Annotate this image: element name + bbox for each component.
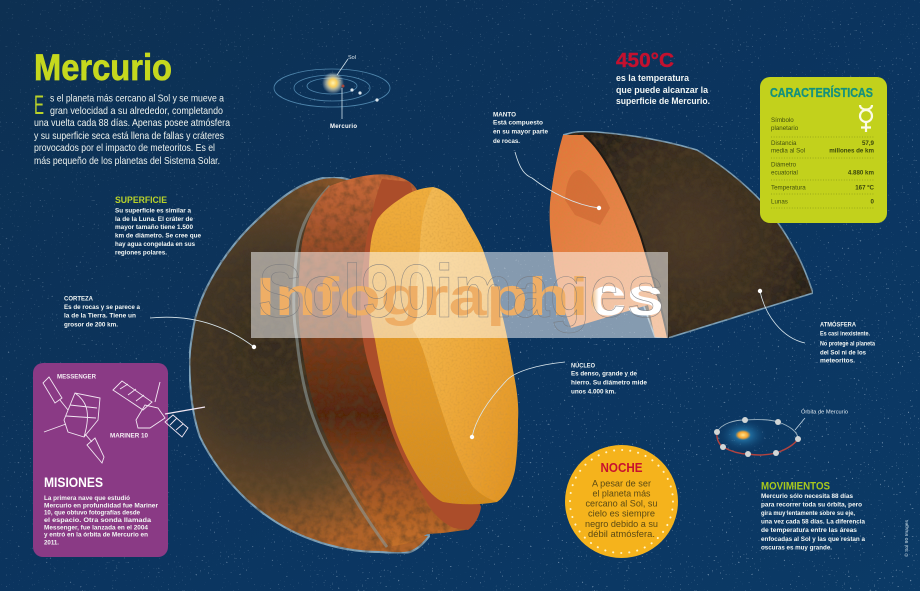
temperature callout: que puede alcanzar la: [616, 84, 709, 95]
label: atmósfera: ATMÓSFERA: [820, 320, 856, 328]
intro paragraph: más pequeño de los planetas del Sistema Solar.: [34, 156, 220, 167]
intro paragraph: [34, 90, 230, 167]
characteristics table text: planetario: [771, 125, 799, 132]
planet: upper-right wedge: [550, 131, 813, 338]
characteristics table text: [771, 117, 875, 206]
characteristics table text: 4.880 km: [848, 170, 874, 176]
características heading: CARACTERÍSTICAS: [770, 85, 873, 100]
crust outer shell: [189, 177, 430, 553]
label: superficie: hay agua congelada en sus: [115, 241, 195, 248]
characteristics table text: 167 ºC: [855, 184, 875, 192]
icon: mercury symbol: [860, 105, 872, 132]
label: atmósfera: Es casi inexistente.: [820, 330, 870, 338]
label: superficie: la de la Luna. El cráter de: [115, 216, 193, 223]
label: núcleo: Es denso, grande y de: [571, 370, 637, 378]
label: superficie: Su superficie es similar a: [115, 208, 191, 214]
intro paragraph: provocados por el impacto de meteoritos. Es el: [34, 143, 215, 154]
orbit diagram: Órbita de Mercurio: [801, 408, 848, 416]
characteristics table text: ecuatorial: [771, 170, 798, 176]
label: superficie: SUPERFICIE: [115, 195, 168, 206]
solar system diagram: Mercurio: [330, 124, 357, 130]
label: atmósfera: No protege al planeta: [820, 340, 875, 348]
planet: cut-away main body: [189, 174, 518, 553]
temperature callout: es la temperatura: [616, 72, 690, 83]
misiones text: 2011.: [44, 540, 59, 546]
icon: messenger probe: MESSENGER: [57, 374, 97, 380]
label: corteza: la de la Tierra. Tiene un: [64, 312, 136, 320]
label: movimientos: gira muy lentamente sobre su eje,: [761, 510, 855, 517]
noche heading: NOCHE: [600, 460, 643, 475]
temperature callout: superficie de Mercurio.: [616, 95, 710, 106]
label: corteza: [64, 296, 140, 328]
panel: misiones: [33, 363, 205, 557]
core flat face: [413, 187, 518, 502]
characteristics table text: Lunas: [771, 198, 788, 206]
misiones text: La primera nave que estudió: [44, 495, 130, 502]
inner dark mantle: [565, 170, 610, 225]
noche text: [585, 478, 658, 540]
label: núcleo: unos 4.000 km.: [571, 388, 616, 396]
noche text: cielo es siempre: [588, 508, 655, 520]
label: movimientos: MOVIMIENTOS: [761, 480, 830, 492]
icon: messenger probe: [43, 374, 104, 463]
panel: características: [760, 77, 887, 223]
noche text: el planeta más: [592, 488, 651, 500]
label: movimientos: enfocadas al Sol y las que restan a: [761, 536, 865, 543]
noche text: A pesar de ser: [592, 478, 652, 490]
label: movimientos: una vez cada 58 días. La diferencia: [761, 518, 865, 526]
mantle and crust boundary: [584, 135, 668, 338]
label: movimientos: [761, 480, 865, 552]
crust cut edge: [294, 186, 387, 547]
temperature callout: 450°C: [616, 50, 674, 72]
misiones text: Mercurio en profundidad fue Mariner: [44, 502, 158, 510]
label: núcleo: NÚCLEO: [571, 360, 595, 370]
intro paragraph: y su superficie seca está llena de fallas y cráteres: [34, 131, 224, 142]
icon: mariner 10 probe: MARINER 10: [110, 432, 149, 440]
label: atmósfera: [820, 320, 875, 364]
misiones text: Messenger, fue lanzada en el 2004: [44, 524, 148, 532]
misiones text: el espacio. Otra sonda llamada: [44, 517, 151, 524]
intro paragraph: una vuelta cada 88 días. Apenas posee atmósfera: [34, 118, 230, 129]
label: atmósfera: del Sol ni de los: [820, 350, 866, 356]
misiones text: 10, que obtuvo fotografías desde: [44, 510, 140, 516]
label: manto: Está compuesto: [493, 120, 543, 126]
label: núcleo: hierro. Su diámetro mide: [571, 380, 647, 386]
label: corteza: Es de rocas y se parece a: [64, 304, 140, 311]
watermark: Sol90images: [258, 249, 664, 333]
label: corteza: grosor de 200 km.: [64, 322, 118, 328]
characteristics table text: Temperatura: [771, 184, 806, 192]
characteristics table text: Distancia: [771, 140, 797, 147]
label: corteza: CORTEZA: [64, 296, 93, 302]
label: superficie: regiones polares.: [115, 250, 167, 256]
characteristics table text: media al Sol: [771, 148, 805, 154]
intro paragraph: s el planeta más cercano al Sol y se mueve a: [50, 94, 224, 104]
noche text: cercano al Sol, su: [586, 498, 658, 510]
label: manto: de rocas.: [493, 138, 520, 145]
label: movimientos: oscuras es muy grande.: [761, 544, 832, 552]
misiones heading: MISIONES: [44, 474, 103, 490]
temperature callout: [616, 50, 710, 106]
characteristics table text: Diámetro: [771, 162, 797, 168]
panel: noche: [565, 445, 678, 558]
label: manto: [493, 112, 548, 145]
title: Mercurio: [34, 47, 172, 88]
mantle: [298, 174, 480, 546]
intro paragraph: gran velocidad a su alrededor, completando: [50, 106, 223, 117]
noche text: negro debido a su: [585, 519, 658, 530]
label: movimientos: para recorrer toda su órbita, pero: [761, 502, 862, 508]
characteristics table text: 57,9: [862, 140, 875, 147]
label: superficie: [115, 195, 201, 256]
misiones text: [44, 495, 158, 546]
noche text: débil atmósfera.: [588, 529, 655, 540]
icon: mariner 10 probe: [110, 381, 205, 440]
label: manto: en su mayor parte: [493, 128, 548, 136]
label: atmósfera: meteoritos.: [820, 358, 855, 364]
label: movimientos: de temperatura entre las áreas: [761, 527, 857, 534]
watermark: Infographics: [256, 267, 664, 327]
wedge surface: [563, 131, 813, 338]
label: superficie: mayor tamaño tiene 1.500: [115, 224, 193, 231]
orbit diagram: [714, 408, 848, 457]
intro paragraph: E: [34, 90, 44, 120]
solar system diagram: Sol: [348, 55, 356, 61]
copyright note: © Sol 90 Images: [903, 519, 909, 557]
solar system diagram: [274, 55, 390, 130]
characteristics table text: Símbolo: [771, 117, 794, 124]
label: manto: MANTO: [493, 112, 516, 118]
mantle section: [550, 135, 668, 338]
label: movimientos: Mercurio sólo necesita 88 días: [761, 493, 853, 500]
mantle band bordering core: [361, 179, 481, 530]
misiones text: y entró en la órbita de Mercurio en: [44, 532, 148, 538]
core side: [369, 187, 497, 504]
characteristics table text: millones de km: [829, 148, 874, 154]
leader lines: [150, 152, 805, 439]
label: superficie: km de diámetro. Se cree que: [115, 232, 201, 240]
label: núcleo: [571, 360, 647, 396]
characteristics table text: 0: [871, 198, 875, 206]
